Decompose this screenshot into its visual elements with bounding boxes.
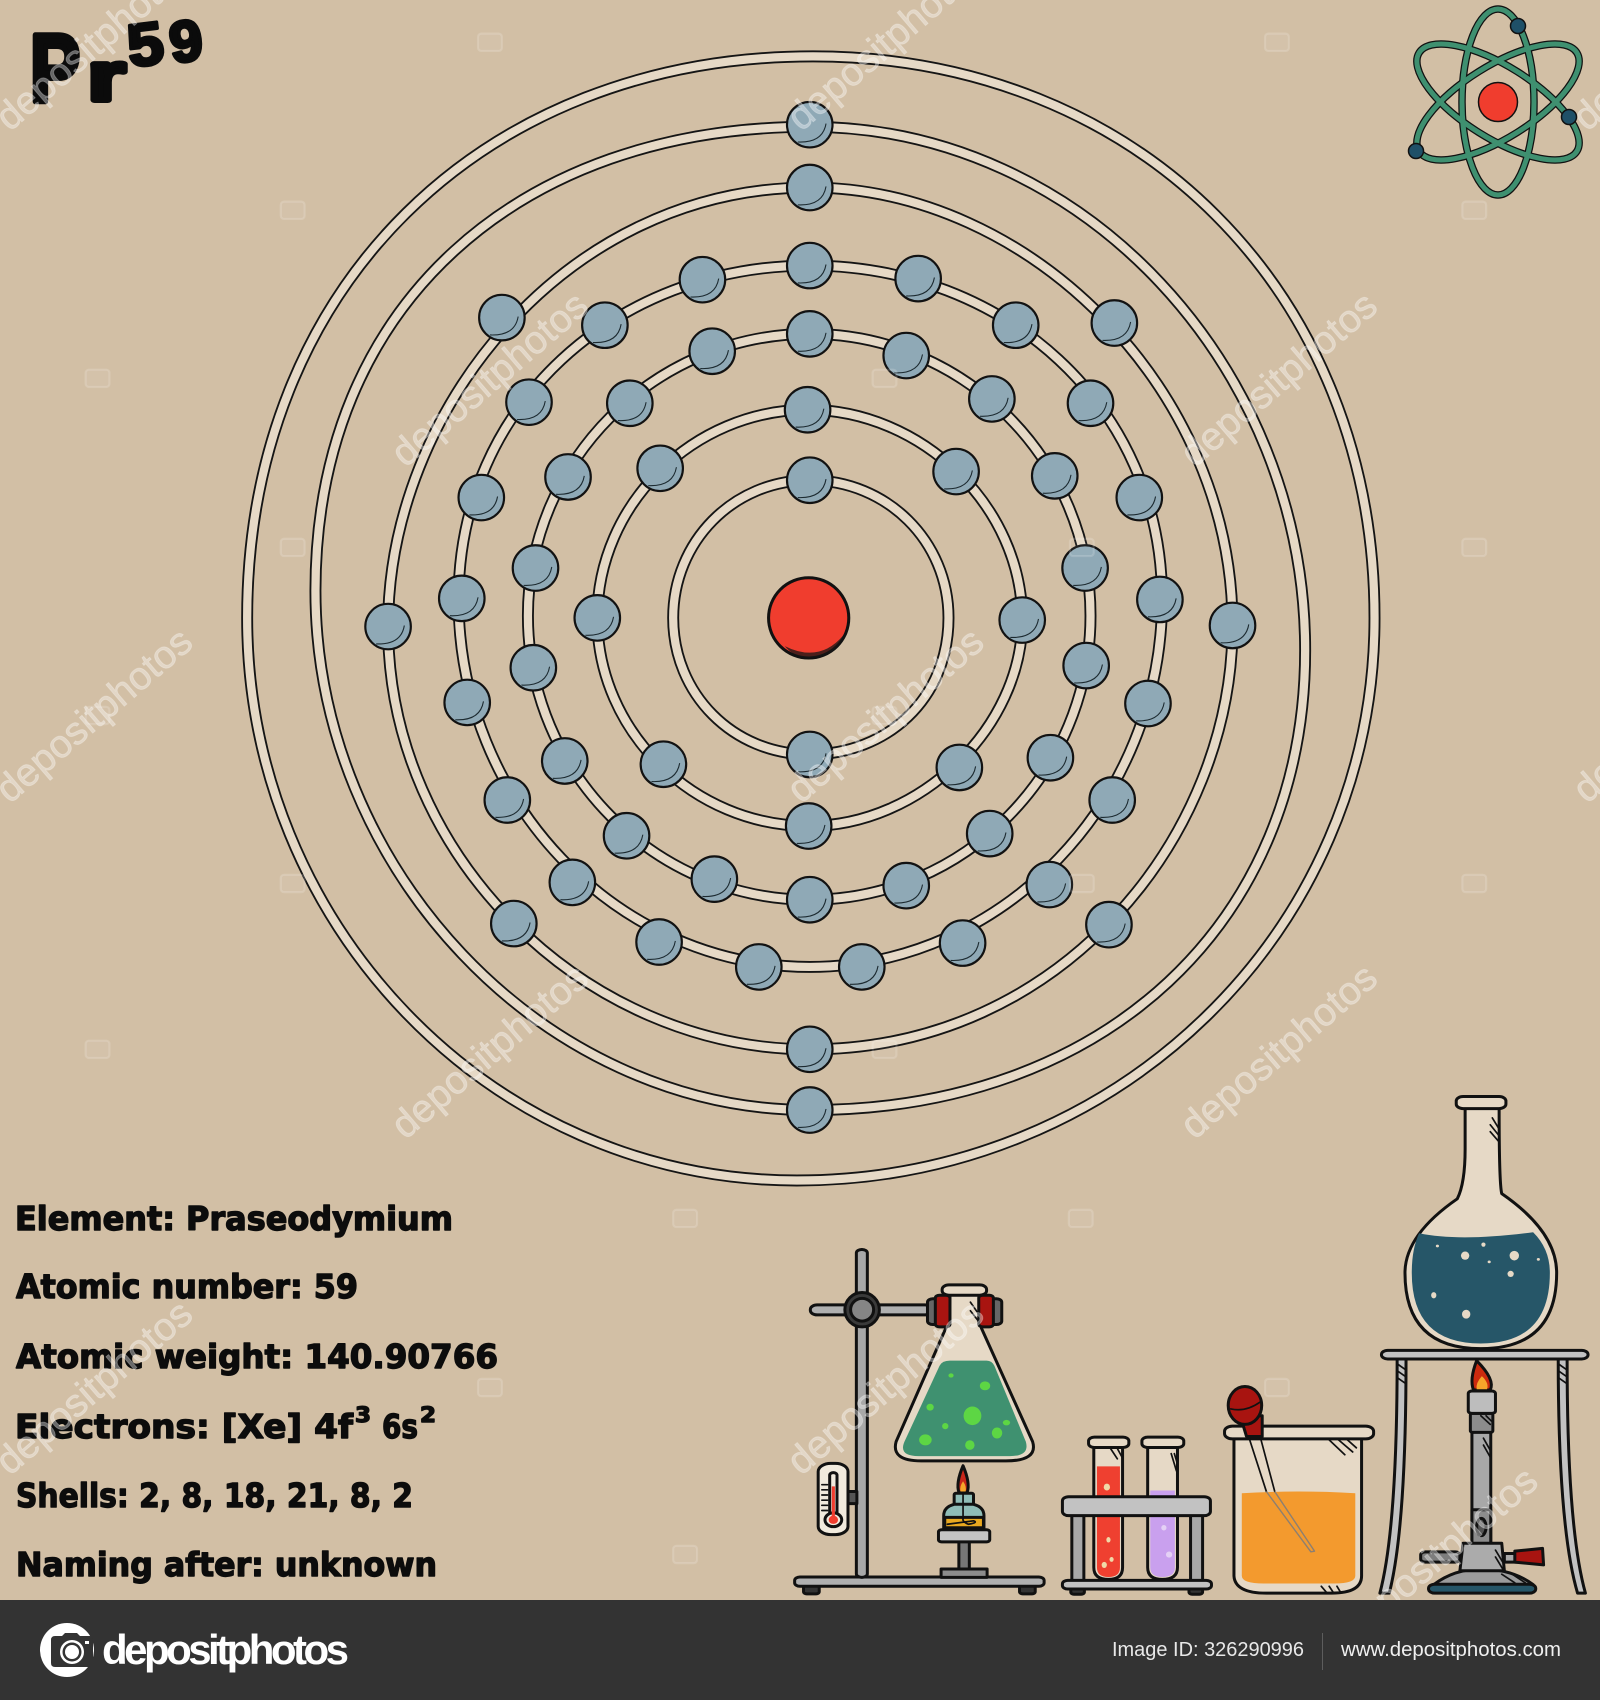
watermark text: depositphotos (1172, 284, 1386, 475)
icon: depositphotos logo (40, 1623, 94, 1677)
title: element symbol: P (30, 15, 80, 122)
watermark text: depositphotos (1172, 956, 1386, 1147)
electrons: shell 5 (8) (365, 165, 1255, 1072)
icon: atom (1400, 9, 1596, 195)
electrons: shell 3 (18) (511, 311, 1109, 922)
laboratory equipment (795, 1097, 1588, 1594)
watermark text: depositphotos (779, 1292, 992, 1483)
title: element symbol (30, 7, 206, 122)
electrons: shell 2 (8) (575, 387, 1045, 849)
thermometer (818, 1463, 857, 1535)
beaker with orange liquid and dropper (1225, 1387, 1374, 1593)
shell rings (247, 56, 1375, 1180)
element facts text block (15, 1199, 498, 1584)
element facts text block: Shells: 2, 8, 18, 21, 8, 2 (16, 1476, 413, 1515)
element facts text block: Electrons: [Xe] 4f (15, 1407, 354, 1446)
watermark camera icons (86, 34, 1486, 1563)
title: element symbol: r (88, 39, 125, 115)
electrons: shell 1 (2) (787, 457, 833, 777)
ring stand with clamp (795, 1249, 1044, 1594)
element facts text block: 3 (355, 1403, 371, 1427)
website: www.depositphotos.com (1340, 1639, 1561, 1661)
element facts text block: Atomic number: 59 (16, 1267, 358, 1306)
watermark text: depositphotos (779, 620, 992, 811)
element facts text block: Naming after: unknown (16, 1545, 437, 1584)
atom diagram: electron shells (247, 56, 1375, 1180)
bunsen burner with flame (1421, 1361, 1544, 1593)
conical flask with green liquid (895, 1285, 1033, 1461)
element facts text block: 6s (382, 1407, 418, 1446)
electrons: shell 4 (21) (439, 243, 1183, 990)
tripod stand (1380, 1350, 1588, 1593)
element facts text block: Element: Praseodymium (15, 1199, 453, 1238)
watermark text: depositphotos (383, 956, 596, 1147)
footer bar (0, 1600, 1600, 1700)
nucleus (769, 578, 849, 658)
title: element symbol: 9 (166, 7, 206, 76)
image id: Image ID: 326290996 (1112, 1639, 1304, 1661)
electrons: shell 6 (2) (787, 102, 833, 1133)
watermark text: depositphotos (383, 284, 596, 475)
element facts text block: Atomic weight: 140.90766 (16, 1337, 498, 1376)
spirit burner (938, 1466, 990, 1577)
round-bottom flask with blue liquid (1405, 1097, 1557, 1349)
test tubes in rack (1062, 1437, 1211, 1594)
watermark text: depositphotos (1333, 1459, 1546, 1650)
title: element symbol: 5 (123, 9, 167, 80)
element facts text block: 2 (420, 1403, 436, 1427)
logo wordmark: depositphotos (102, 1626, 349, 1673)
